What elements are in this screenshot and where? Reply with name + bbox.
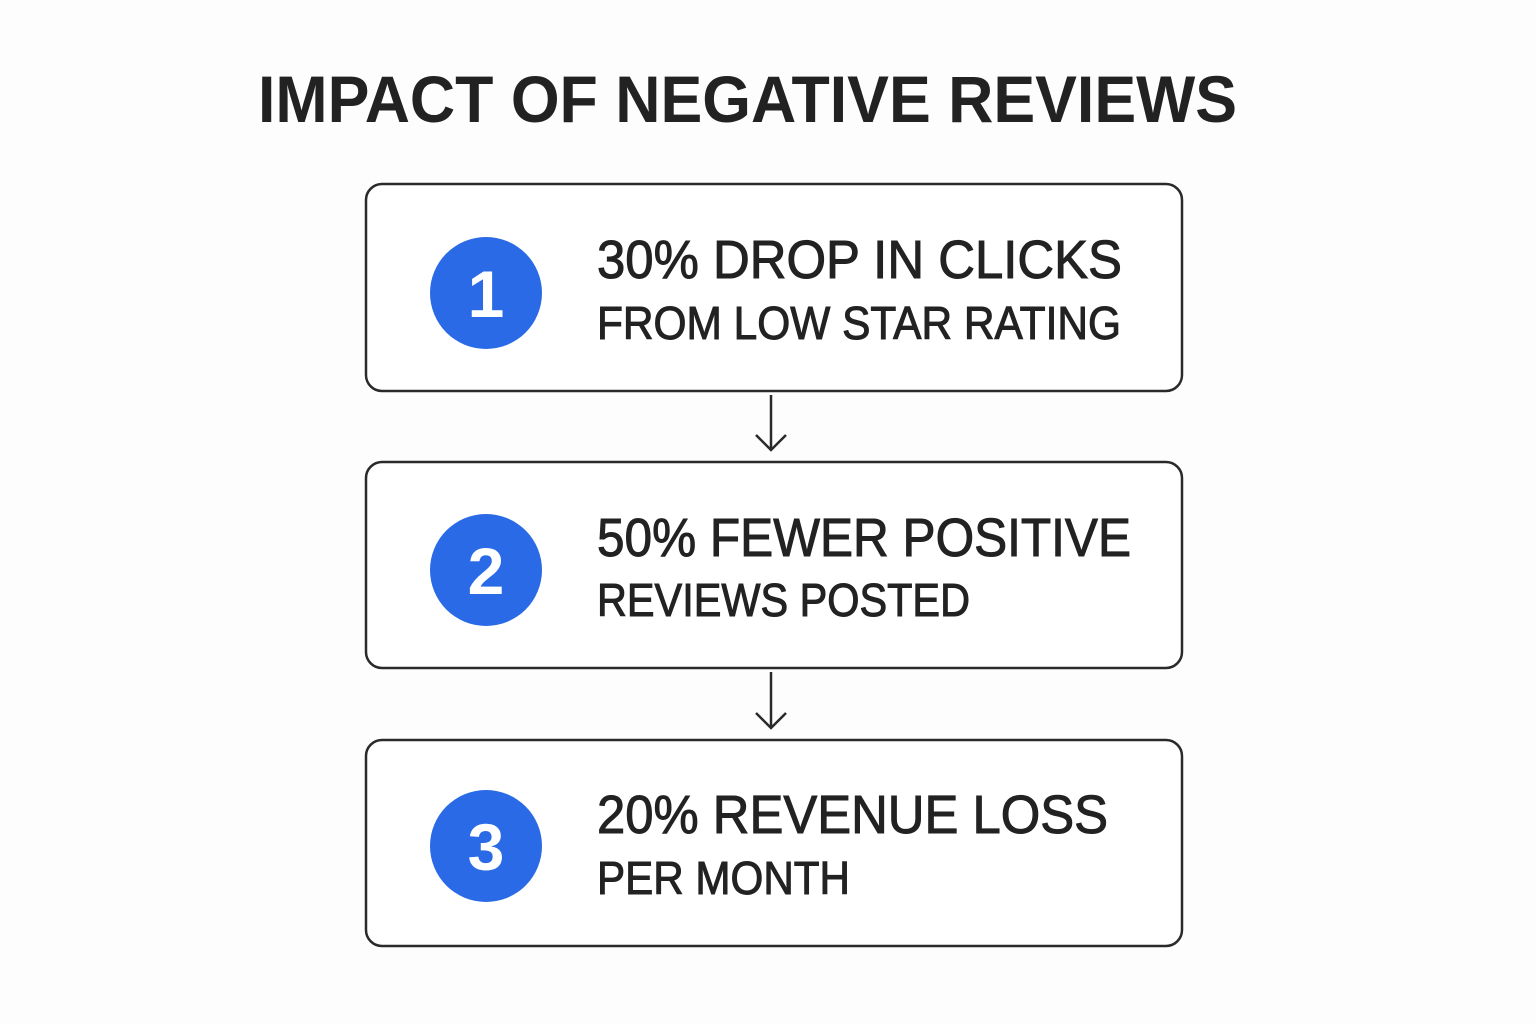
text: step 2: 50% FEWER POSITIVE: [597, 508, 1131, 568]
title: IMPACT OF NEGATIVE REVIEWS: [258, 62, 1237, 136]
icon: number 3: [430, 790, 542, 902]
panel: step 3: [366, 740, 1182, 946]
text: step 3: 20% REVENUE LOSS: [597, 785, 1108, 845]
icon: number 1: [430, 237, 542, 349]
icon: number 3: 3: [468, 810, 504, 884]
arrow 1: [756, 395, 786, 450]
text: step 3: PER MONTH: [597, 852, 850, 904]
text: step 1: [597, 230, 1122, 349]
icon: number 2: 2: [468, 534, 504, 608]
icon: number 1: 1: [468, 257, 504, 331]
text: step 3: [597, 785, 1108, 904]
panel: step 1: [366, 184, 1182, 391]
text: step 1: FROM LOW STAR RATING: [597, 297, 1121, 349]
text: step 1: 30% DROP IN CLICKS: [597, 230, 1122, 290]
icon: number 2: [430, 514, 542, 626]
text: step 2: [597, 508, 1131, 626]
panel: step 2: [366, 462, 1182, 668]
text: step 2: REVIEWS POSTED: [597, 574, 970, 626]
arrow 2: [756, 672, 786, 728]
